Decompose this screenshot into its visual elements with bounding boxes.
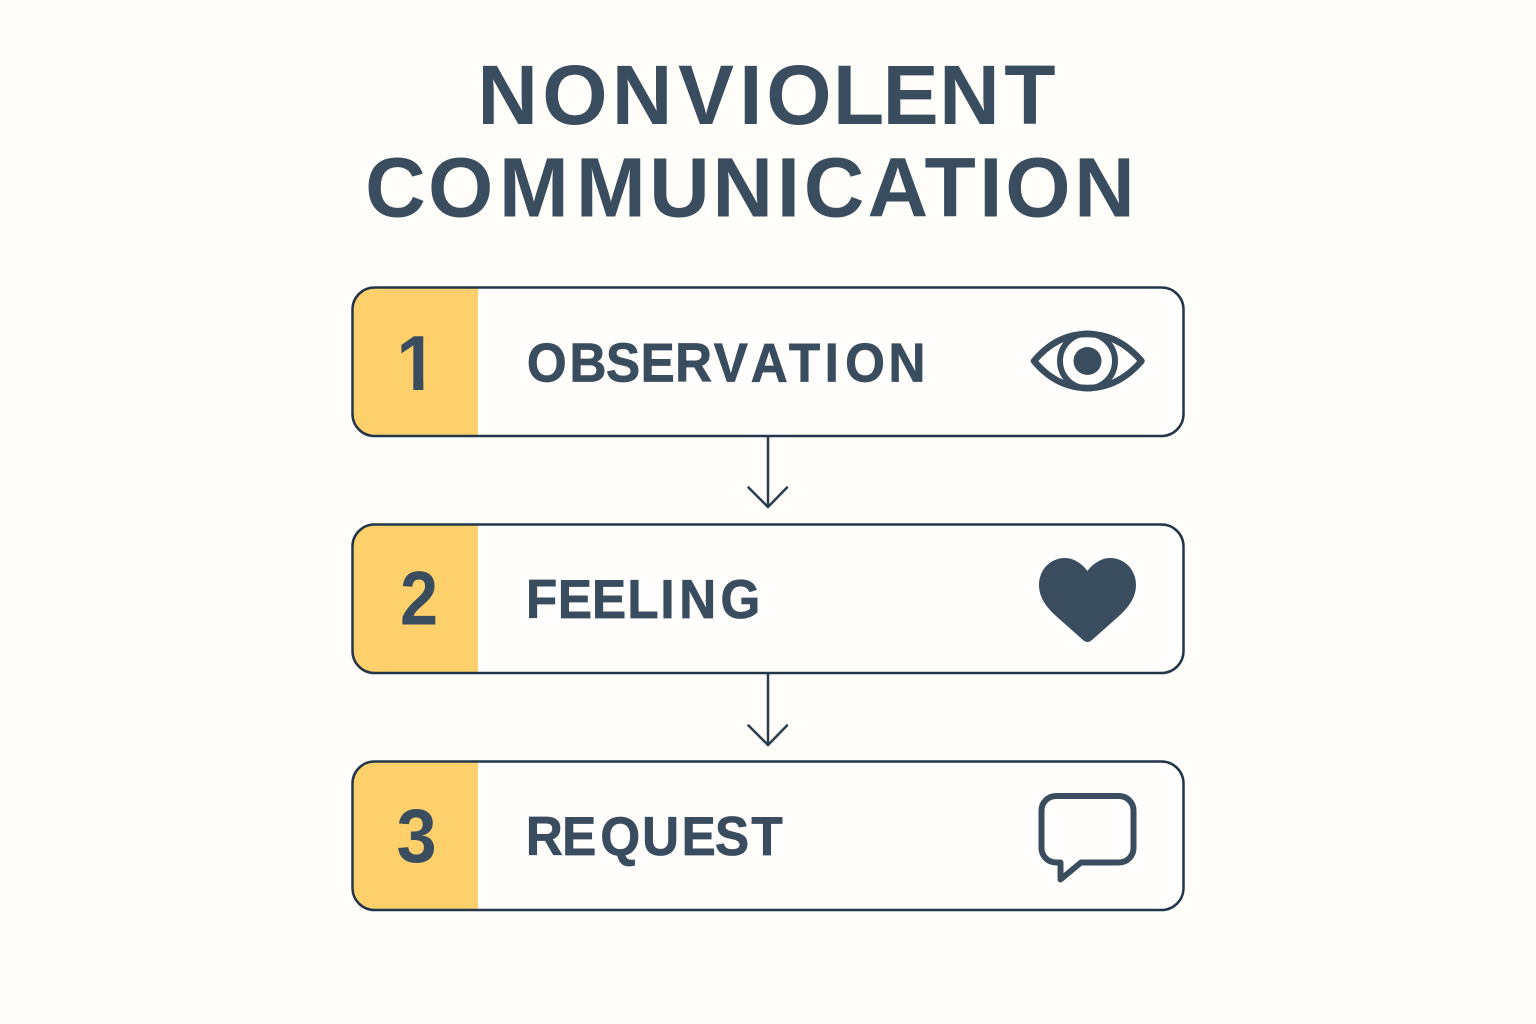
icon: eye bbox=[1034, 334, 1142, 388]
panel: step 3 request bbox=[352, 762, 1184, 910]
arrow: step 1 to step 2 bbox=[748, 437, 787, 507]
number block 2 bbox=[352, 524, 478, 673]
label: observation: OBSERVATION bbox=[527, 333, 925, 394]
number 3: 3 bbox=[396, 793, 437, 878]
title: NONVIOLENT bbox=[477, 48, 1056, 142]
title bbox=[365, 48, 1135, 234]
number block 3 bbox=[352, 762, 478, 910]
panel: step 2 feeling bbox=[352, 524, 1184, 673]
title: COMMUNICATION bbox=[365, 140, 1135, 234]
arrow: step 2 to step 3 bbox=[748, 674, 787, 745]
label: request: REQUEST bbox=[526, 806, 783, 867]
icon: heart bbox=[1039, 558, 1136, 642]
infographic bbox=[351, 65, 1185, 912]
label: feeling: FEELING bbox=[526, 569, 760, 630]
panel: step 1 observation bbox=[352, 288, 1184, 436]
number block 1 bbox=[352, 288, 478, 436]
number 2: 2 bbox=[400, 557, 438, 641]
number 1: 1 bbox=[396, 319, 437, 407]
icon: speech bubble bbox=[1042, 796, 1134, 880]
